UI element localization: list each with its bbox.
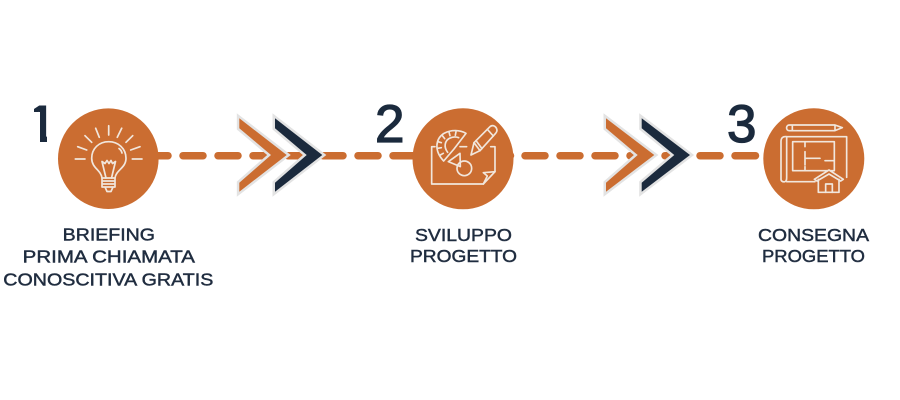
dashed connector: step 2 to step 3 [505,152,756,159]
number 1: 1 [26,95,56,154]
icon: blueprint with house [781,125,847,192]
step 3: consegna progetto [727,95,869,266]
label: briefing: PRIMA CHIAMATA [23,247,195,267]
number 2: 2 [375,95,404,154]
circle badge 1 [58,108,159,209]
icon: protractor, pencil and drawing sheet [432,126,497,184]
label: sviluppo progetto: SVILUPPO [415,225,512,245]
circle badge 3 [763,108,864,209]
step 1: briefing [3,95,213,290]
label: consegna progetto: PROGETTO [762,246,865,266]
arrow: double chevron 2 [606,118,690,192]
label: briefing: BRIEFING [63,225,155,245]
step 2: sviluppo progetto [375,95,517,266]
label: consegna progetto [758,225,869,266]
arrow: double chevron 1 [239,118,322,192]
dashed connector: step 1 to step 2 [150,152,420,159]
label: consegna progetto: CONSEGNA [758,225,869,245]
circle badge 2 [412,108,514,209]
icon: light bulb [75,126,142,192]
number 3: 3 [727,95,756,154]
label: briefing [3,225,213,290]
label: sviluppo progetto [410,225,517,266]
label: briefing: CONOSCITIVA GRATIS [3,270,213,290]
label: sviluppo progetto: PROGETTO [410,246,517,266]
